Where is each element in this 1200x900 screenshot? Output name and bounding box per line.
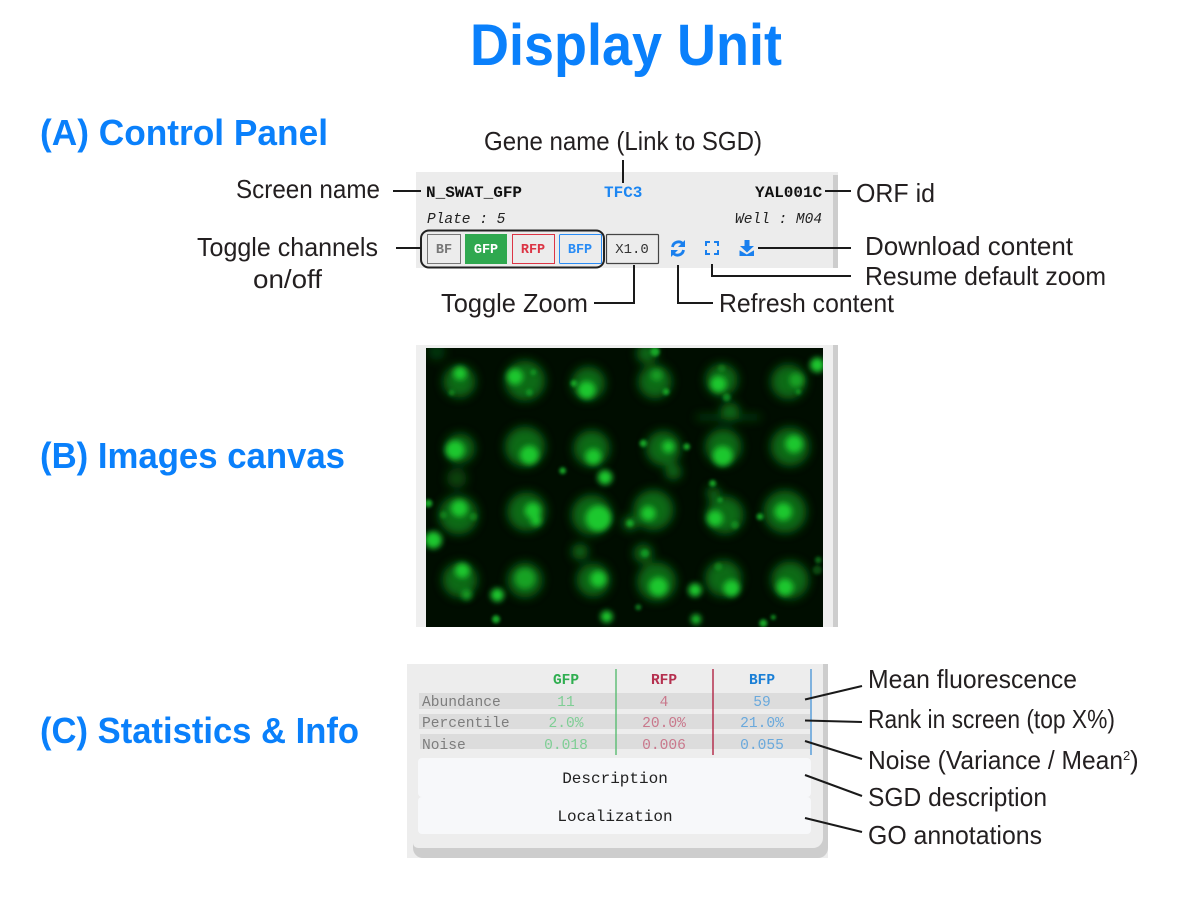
ORF id value: YAL001C — [755, 184, 823, 202]
row: abundance: 59 — [753, 695, 771, 711]
well text: Well : M04 — [735, 212, 822, 228]
label: toggle channels: Toggle channels — [197, 232, 378, 262]
label: GO annotations: GO annotations — [868, 820, 1042, 850]
label: resume default zoom: Resume default zoom — [865, 261, 1106, 291]
heading: control panel: (A) Control Panel — [40, 112, 328, 153]
button: BFP: BFP — [568, 243, 592, 258]
label: resume default zoom — [712, 261, 1106, 291]
row: percentile: 21.0% — [740, 716, 784, 732]
label: ORF id: ORF id — [856, 178, 935, 208]
button: BFP — [560, 234, 602, 264]
button: GFP — [465, 234, 507, 264]
column headers: BFP — [749, 673, 775, 689]
icon: refresh — [671, 240, 685, 257]
gene name value: TFC3 — [604, 184, 642, 202]
heading: images canvas: (B) Images canvas — [40, 435, 345, 476]
channel toggle outline — [421, 230, 604, 268]
row: percentile — [422, 716, 784, 732]
row: percentile: 20.0% — [642, 716, 686, 732]
column headers: GFP — [553, 673, 579, 689]
label: toggle zoom — [441, 265, 634, 318]
button: RFP: RFP — [521, 243, 545, 258]
label: refresh content: Refresh content — [719, 288, 895, 318]
row: abundance: 11 — [557, 695, 575, 711]
label: rank in screen: Rank in screen (top X%) — [868, 704, 1115, 734]
button: RFP — [512, 234, 554, 264]
description box — [418, 758, 811, 797]
icon: download — [740, 240, 754, 256]
label: GO annotations — [805, 818, 1042, 850]
row: abundance: 4 — [660, 695, 669, 711]
button: GFP: GFP — [474, 243, 498, 258]
column separators — [616, 669, 811, 755]
row: noise — [422, 738, 784, 754]
row: noise: 0.055 — [740, 738, 784, 754]
row: noise: 0.006 — [642, 738, 686, 754]
label: mean fluorescence — [805, 664, 1077, 700]
button: BF — [428, 234, 460, 264]
label: toggle channels: on/off — [253, 264, 323, 294]
screen name value: N_SWAT_GFP — [426, 184, 522, 202]
icon: default zoom — [706, 242, 718, 254]
row: percentile: Percentile — [422, 716, 510, 732]
label: screen name: Screen name — [236, 174, 380, 204]
button: BF: BF — [436, 243, 452, 258]
plate text: Plate : 5 — [427, 212, 506, 228]
label: SGD description: SGD description — [868, 782, 1047, 812]
title: Display Unit — [470, 13, 782, 78]
label: toggle zoom: Toggle Zoom — [441, 288, 588, 318]
button: zoom — [606, 234, 658, 264]
heading: statistics and info: (C) Statistics & Info — [40, 710, 359, 751]
localization box: Localization — [557, 808, 673, 826]
label: toggle channels — [197, 232, 421, 294]
table row stripes — [419, 693, 810, 749]
label: noise: Noise (Variance / Mean — [868, 745, 1123, 775]
row: percentile: 2.0% — [548, 716, 584, 732]
label: mean fluorescence: Mean fluorescence — [868, 664, 1077, 694]
column headers — [553, 673, 775, 689]
label: download content: Download content — [865, 231, 1074, 261]
row: abundance: Abundance — [422, 695, 501, 711]
column headers: RFP — [651, 673, 677, 689]
row: noise: Noise — [422, 738, 466, 754]
label: gene name: Gene name (Link to SGD) — [484, 126, 762, 156]
panel: statistics and info — [407, 664, 828, 858]
panel: control panel — [416, 172, 838, 268]
label: refresh content — [678, 265, 895, 318]
label: noise: 2 — [1123, 748, 1130, 763]
description box: Description — [562, 770, 668, 788]
label: noise: ) — [1130, 745, 1139, 775]
localization box — [418, 797, 811, 834]
fluorescence cells — [424, 343, 825, 627]
row: abundance — [422, 695, 771, 711]
row: noise: 0.018 — [544, 738, 588, 754]
label: SGD description — [805, 775, 1047, 812]
button: zoom: X1.0 — [615, 242, 649, 258]
panel: images canvas — [416, 343, 838, 627]
label: ORF id — [825, 178, 935, 208]
